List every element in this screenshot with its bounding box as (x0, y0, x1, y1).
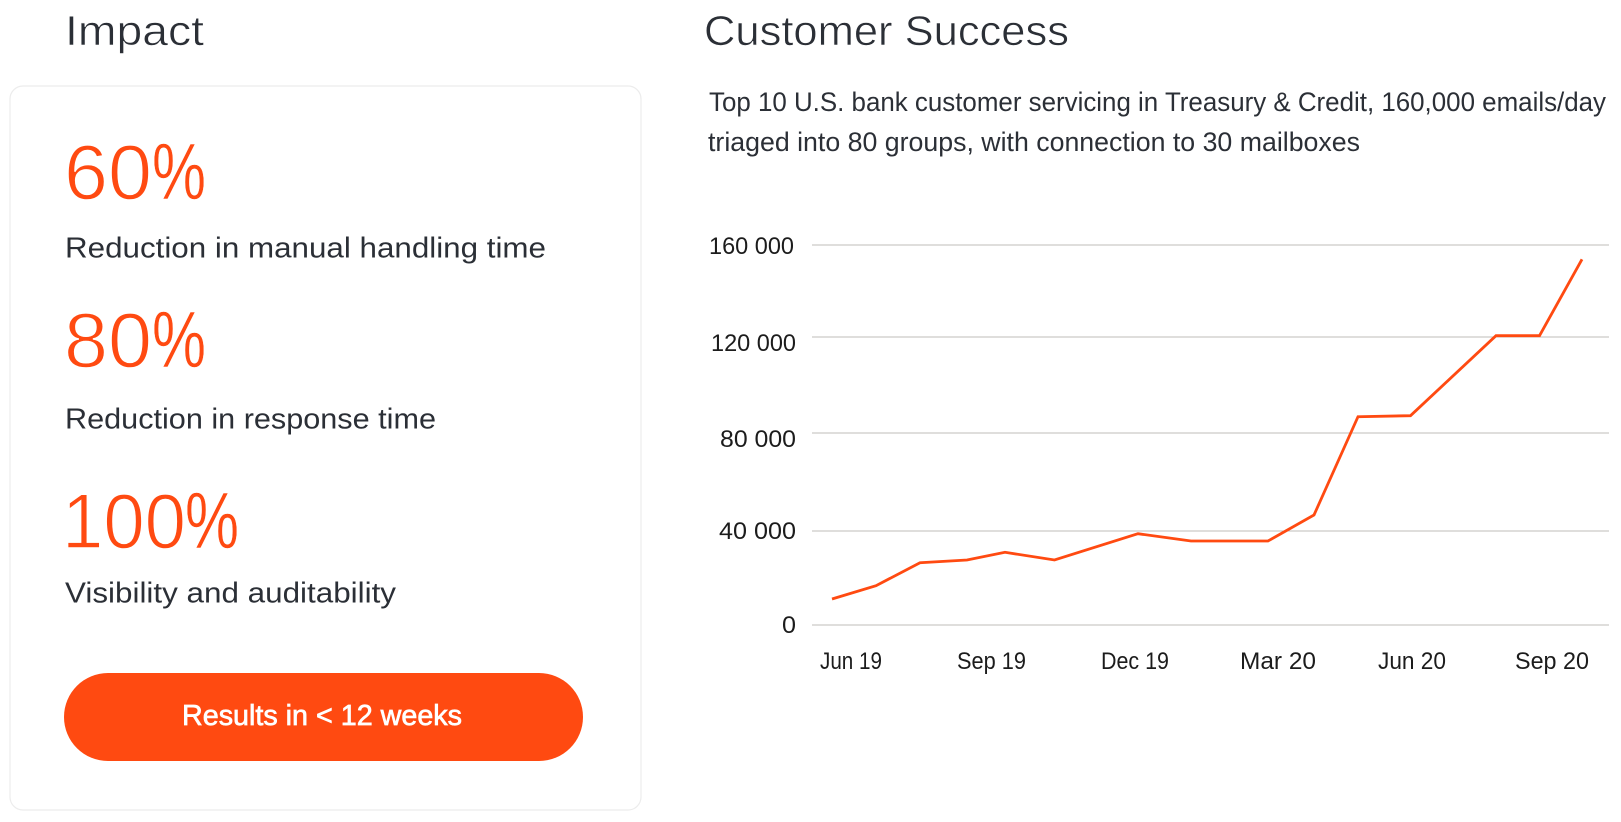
panel card background (10, 86, 641, 810)
metric: 80%: Reduction in response time (65, 404, 436, 436)
x-axis labels: Jun 20 (1378, 648, 1446, 675)
heading: Customer Success: Customer Success (704, 7, 1069, 54)
metric: 60%: % (152, 127, 206, 216)
metric: 60%: 60 (64, 128, 152, 216)
metric: 100%: % (185, 476, 239, 565)
x-axis labels: Mar 20 (1240, 648, 1316, 675)
y-axis labels (709, 233, 796, 639)
x-axis labels (820, 648, 1589, 675)
x-axis labels: Sep 19 (957, 648, 1026, 675)
x-axis labels: Jun 19 (820, 648, 882, 675)
y-axis labels: 0 (782, 612, 796, 639)
metric: 60% (64, 127, 546, 264)
metric: 80%: % (152, 295, 206, 384)
x-axis labels: Dec 19 (1101, 648, 1169, 675)
metric: 100%: Visibility and auditability (65, 578, 397, 610)
button: results in under 12 weeks (64, 673, 583, 761)
line chart: emails per day (709, 233, 1609, 675)
heading: Impact: Impact (65, 7, 204, 54)
y-axis labels: 160 000 (709, 233, 794, 260)
metric: 80%: 80 (64, 296, 152, 384)
button: results in under 12 weeks: Results in < 12 weeks (182, 700, 462, 732)
text block: customer description (708, 87, 1606, 157)
metric: 100% (62, 476, 397, 610)
data line (832, 259, 1582, 599)
metric: 100%: 100 (62, 477, 186, 565)
y-axis labels: 120 000 (711, 330, 796, 357)
x-axis labels: Sep 20 (1515, 648, 1589, 675)
metric: 80% (64, 295, 436, 436)
metric: 60%: Reduction in manual handling time (65, 232, 546, 264)
y-axis labels: 40 000 (719, 518, 796, 545)
panel: impact metrics (10, 86, 641, 810)
text block: customer description: triaged into 80 groups, with connection to 30 mailboxes (708, 127, 1360, 157)
text block: customer description: Top 10 U.S. bank customer servicing in Treasury & Credit, 160,000 emails/day (709, 87, 1606, 117)
y-axis labels: 80 000 (720, 426, 796, 453)
